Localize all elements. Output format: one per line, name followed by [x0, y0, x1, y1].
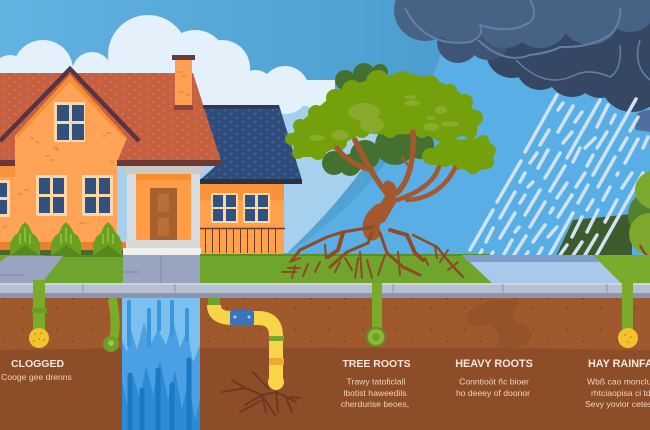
pipe: small green bend — [103, 298, 119, 352]
lawn and walkways — [0, 254, 650, 284]
main roof — [0, 73, 221, 161]
bushes — [10, 222, 122, 255]
label: tree roots: TREE ROOTS — [342, 358, 411, 370]
tree — [282, 63, 496, 278]
pipe: clogged drain — [29, 280, 49, 348]
eaves — [0, 160, 15, 166]
label: heavy roots: HEAVY ROOTS — [455, 358, 533, 370]
burst yellow pipe — [208, 298, 284, 390]
wing windows — [211, 193, 270, 223]
wing wall — [200, 184, 284, 254]
pavement — [0, 283, 650, 298]
gable window — [54, 102, 85, 142]
right bush — [628, 171, 650, 258]
house — [0, 55, 302, 255]
pipe coupling — [230, 310, 254, 326]
storm cloud — [394, 0, 650, 132]
main gable wall — [15, 75, 127, 250]
blue side roof — [200, 105, 302, 180]
label: tree roots — [341, 358, 411, 409]
main foliage — [285, 70, 496, 174]
label: heavy roots — [455, 358, 533, 398]
hedge in background — [556, 214, 632, 256]
label: tree roots: Trawy tatoficlall — [347, 376, 406, 386]
label: clogged — [1, 358, 72, 382]
label: clogged: CLOGGED — [11, 358, 64, 370]
foliage highlights — [309, 95, 459, 141]
label: heavy rainfall — [585, 358, 650, 409]
label: heavy roots: Conntioöt ñc bioer — [459, 376, 529, 386]
burst water column — [122, 298, 200, 430]
label: clogged: Cooge gee drenns — [1, 372, 72, 382]
brick details — [3, 133, 114, 227]
label: tree roots: lbotist haweedils — [343, 388, 407, 398]
porch — [123, 166, 204, 255]
dirt stain — [466, 300, 531, 350]
wall base band — [0, 242, 127, 250]
railing — [200, 228, 285, 253]
soil — [0, 298, 650, 430]
trunk and branches — [337, 132, 455, 232]
rain — [470, 95, 648, 260]
label: tree roots: cherdurise beoes, — [341, 399, 409, 409]
back foliage — [322, 63, 434, 176]
label: heavy roots: ho deeey of doonor — [456, 388, 530, 398]
gable trim — [0, 69, 139, 141]
sky — [0, 0, 650, 290]
lower windows — [0, 175, 113, 217]
chimney — [172, 55, 195, 110]
clouds behind house — [0, 15, 335, 114]
roots — [282, 227, 463, 278]
left wall — [0, 166, 16, 250]
pipe roots — [222, 372, 300, 415]
pipe: tree roots — [367, 283, 385, 346]
pipe: heavy rainfall — [618, 283, 638, 348]
